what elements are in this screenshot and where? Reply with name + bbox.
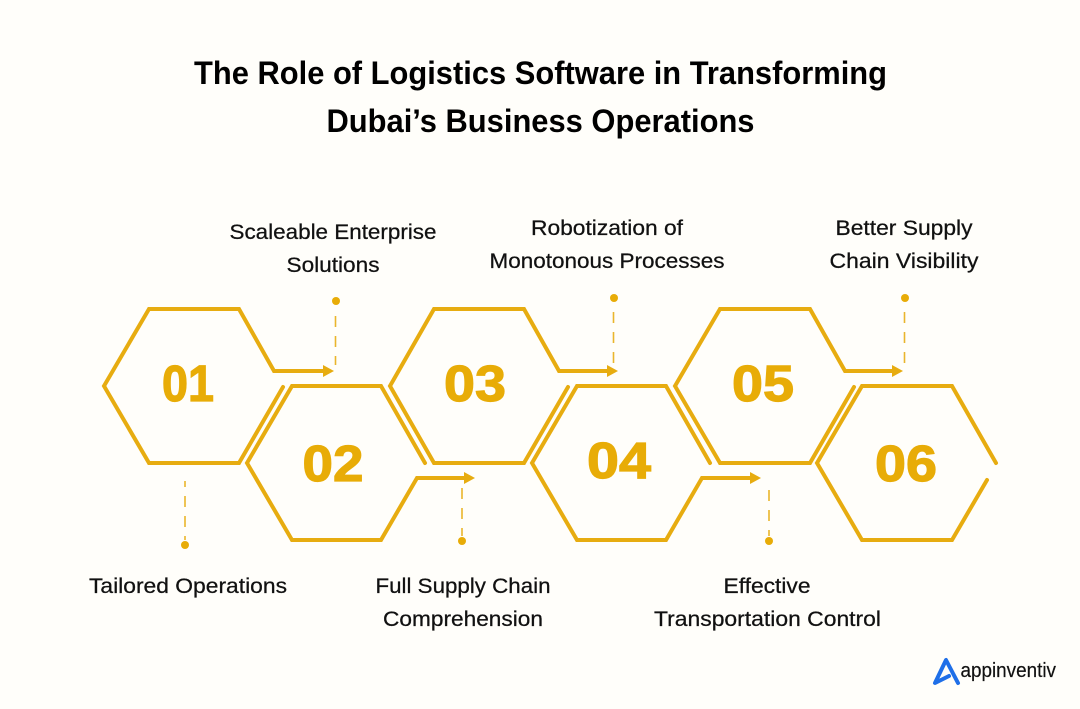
step 06: hexagon (817, 386, 996, 540)
logo: appinventiv: appinventiv (960, 659, 1057, 682)
step 01 label: Tailored Operations (89, 575, 287, 598)
step 05 label: Transportation Control (654, 608, 881, 631)
step 04: hexagon with arrow: 04 (587, 432, 652, 489)
step 06 label: Chain Visibility (830, 250, 979, 273)
step 03: hexagon with arrow (390, 309, 618, 463)
step 04 label (490, 217, 724, 273)
step 06 leader line (901, 294, 909, 364)
step 05 label (654, 575, 881, 631)
step 03 label: Full Supply Chain (376, 575, 550, 598)
step 05 leader line (765, 490, 773, 545)
step 06: hexagon: 06 (875, 435, 937, 492)
step 05 label: Effective (724, 575, 810, 598)
step 02 label: Solutions (286, 254, 380, 277)
step 04 label: Robotization of (531, 217, 683, 240)
title: Dubai’s Business Operations (326, 103, 754, 139)
step 04: hexagon with arrow (532, 386, 761, 540)
step 04 label: Monotonous Processes (490, 250, 724, 273)
step 03: hexagon with arrow: 03 (444, 355, 506, 412)
step 03 label (376, 575, 550, 631)
step 02 label (230, 221, 436, 277)
step 03 leader line (458, 488, 466, 545)
step 02 leader line (332, 297, 340, 365)
step 05: hexagon with arrow (675, 309, 903, 463)
step 03 label: Comprehension (383, 608, 543, 631)
step 02: hexagon with arrow (247, 386, 475, 540)
step 04 leader line (610, 294, 618, 364)
step 06 label (830, 217, 979, 273)
step 01: hexagon with arrow (104, 309, 334, 463)
title: The Role of Logistics Software in Transforming (194, 55, 887, 91)
step 05: hexagon with arrow: 05 (732, 355, 794, 412)
step 01 leader line (181, 481, 189, 549)
step 02: hexagon with arrow: 02 (302, 435, 364, 492)
step 06 label: Better Supply (836, 217, 973, 240)
title (194, 55, 887, 139)
step 01: hexagon with arrow: 01 (162, 355, 214, 412)
step 02 label: Scaleable Enterprise (230, 221, 436, 244)
